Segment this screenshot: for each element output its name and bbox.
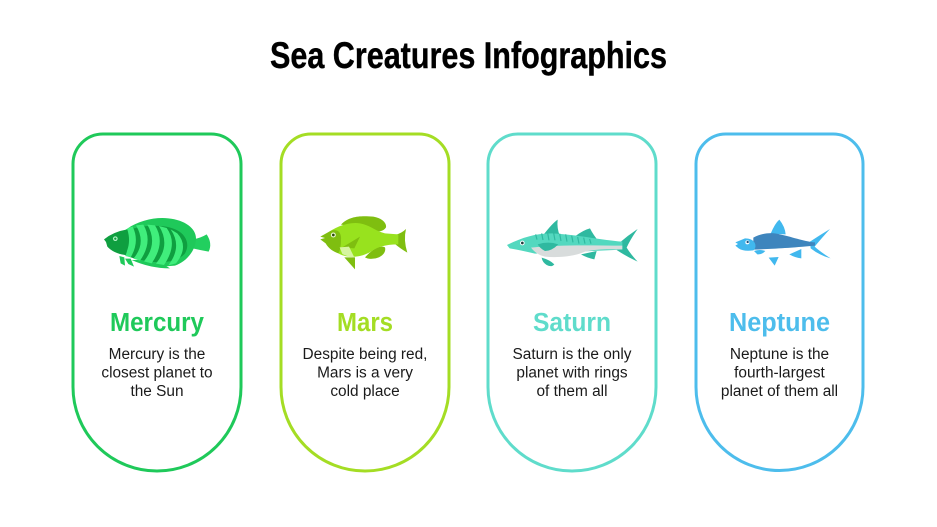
- panel: Neptune: [696, 134, 863, 471]
- heading: Saturn: Saturn: [533, 309, 611, 337]
- panel: Mars: [281, 134, 449, 471]
- heading: Mars: Mars: [337, 309, 393, 337]
- text: Saturn description: Saturn is the only: [513, 346, 632, 363]
- card outline: Saturn: [488, 134, 656, 471]
- card outline: Mars: [281, 134, 449, 471]
- icon: teal fish: [507, 220, 638, 266]
- text: Neptune description: Neptune is the: [730, 346, 829, 363]
- icon: blue fish: [735, 220, 831, 266]
- panel: Saturn: [488, 134, 656, 471]
- card outline: Neptune: [696, 134, 863, 471]
- text: Saturn description: of them all: [536, 383, 608, 400]
- text: Mercury description: Mercury is the: [109, 346, 205, 363]
- text: Neptune description: planet of them all: [721, 383, 838, 400]
- text: Mars description: cold place: [330, 383, 400, 400]
- text: Mars description: Despite being red,: [303, 346, 427, 363]
- text: Mercury description: the Sun: [130, 383, 184, 400]
- text: Mars description: Mars is a very: [317, 364, 413, 382]
- title: Sea Creatures Infographics: [270, 35, 667, 76]
- text: Neptune description: fourth-largest: [734, 364, 826, 382]
- heading: Neptune: Neptune: [729, 309, 830, 337]
- card outline: Mercury: [73, 134, 241, 471]
- heading: Mercury: Mercury: [110, 309, 205, 337]
- text: Saturn description: planet with rings: [516, 364, 628, 382]
- panel: Mercury: [73, 134, 241, 471]
- text: Mercury description: closest planet to: [101, 364, 213, 382]
- icon: green striped fish: [104, 218, 210, 268]
- icon: lime fish: [320, 216, 407, 269]
